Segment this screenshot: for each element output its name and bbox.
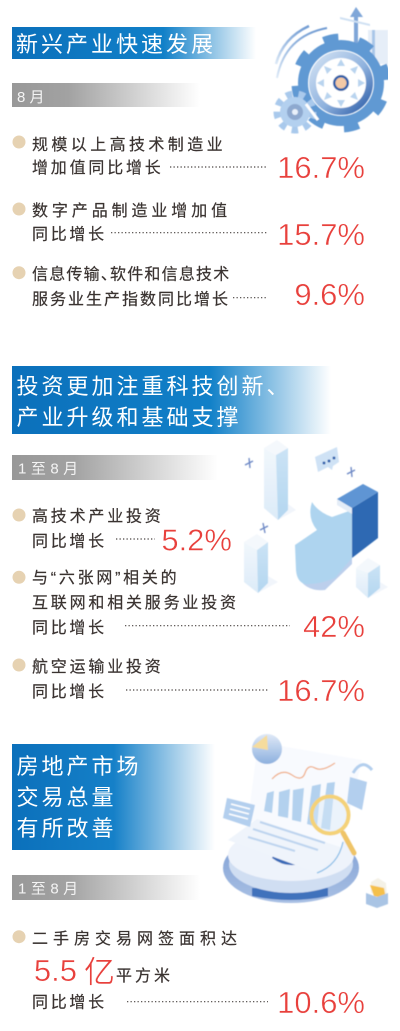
item: air transport [12,658,365,708]
period label: 8 月 [17,89,45,106]
item: second-hand housing: 5.5 [34,953,77,988]
panel: emerging industries [12,7,396,312]
item: six networks: 同比增长 [32,619,107,637]
item: digital products: 15.7% [277,217,365,252]
item: six networks: 互联网和相关服务业投资 [32,594,239,612]
period label [12,875,200,900]
item: air transport: 同比增长 [32,683,107,701]
illustration: document and magnifier [223,734,388,908]
item: high-tech manufacturing [12,136,365,185]
heading banner: 产业升级和基础支撑 [16,405,242,430]
item: high-tech investment: 同比增长 [32,532,107,550]
item: digital products: 数字产品制造业增加值 [32,202,231,220]
heading banner: 交易总量 [16,785,117,810]
heading banner: 投资更加注重科技创新、 [16,374,292,399]
item: second-hand housing: 亿 [84,955,115,990]
heading banner: 房地产市场 [16,754,142,779]
item: second-hand housing [12,930,365,1020]
heading banner [12,27,256,59]
item: air transport: 航空运输业投资 [32,658,164,676]
heading banner: 有所改善 [16,816,117,841]
item: high-tech manufacturing: 规模以上高技术制造业 [32,136,226,154]
item: information services: 9.6% [294,277,365,312]
period label: 1至8月 [18,460,83,478]
item: six networks: 42% [303,609,365,644]
panel: real estate [12,734,388,1020]
illustration: thumbs up and towers [244,440,388,598]
item: information services: 服务业生产指数同比增长 [32,290,230,308]
item: second-hand housing: 平方米 [116,967,173,985]
heading banner: 新兴产业快速发展 [16,32,216,57]
item: high-tech manufacturing: 增加值同比增长 [32,159,164,177]
item: information services: 信息传输、软件和信息技术 [32,266,230,284]
item: air transport: 16.7% [277,673,365,708]
item: second-hand housing: 10.6% [277,985,365,1020]
item: second-hand housing: 二手房交易网签面积达 [32,930,242,948]
item: information services [12,266,365,312]
heading banner [12,366,331,434]
period label: 1至8月 [18,880,83,898]
item: high-tech manufacturing: 16.7% [277,150,365,185]
panel: investment [12,366,388,708]
item: high-tech investment [12,508,232,558]
heading banner [12,744,215,850]
period label [12,83,200,107]
item: six networks [12,569,365,644]
item: digital products: 同比增长 [32,226,107,244]
item: six networks: 与“六张网”相关的 [32,569,179,587]
illustration: gears [276,7,396,138]
item: digital products [12,202,365,252]
item: high-tech investment: 5.2% [161,522,232,558]
item: second-hand housing: 同比增长 [32,994,107,1012]
item: high-tech investment: 高技术产业投资 [32,508,164,526]
period label [12,455,218,480]
